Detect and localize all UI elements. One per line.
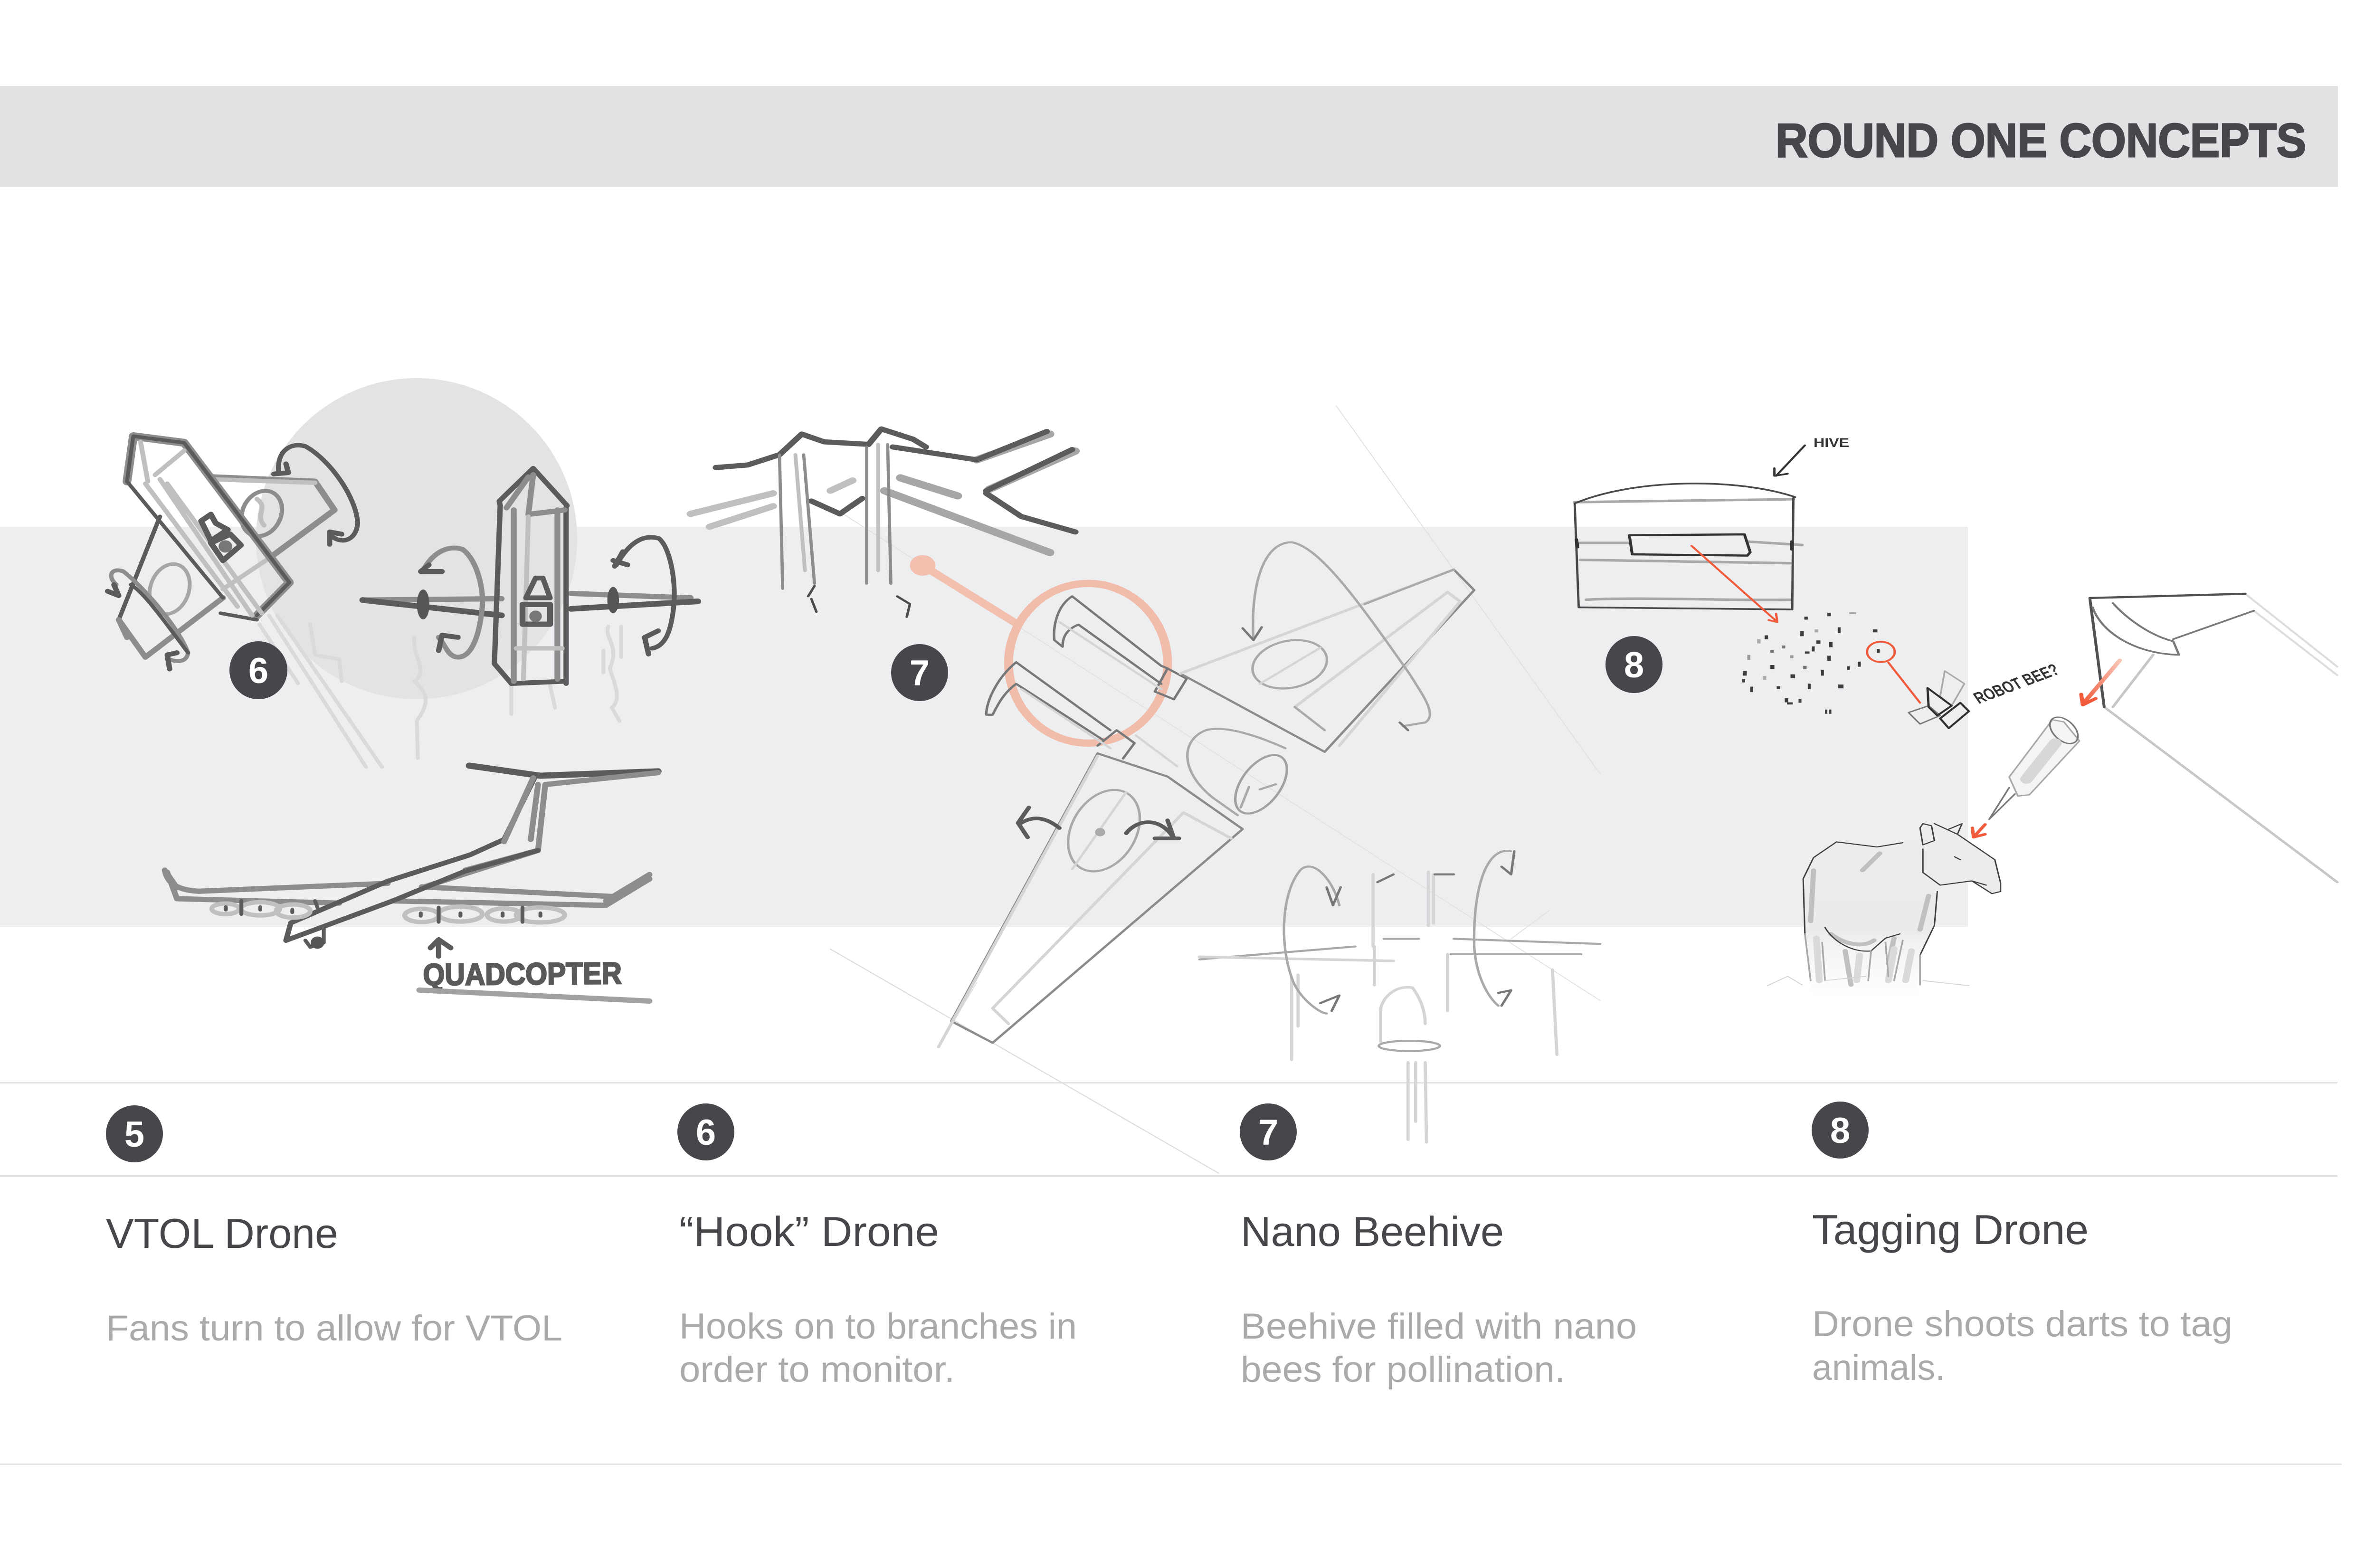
column 5: VTOL drone [106, 1105, 562, 1349]
bee swarm dots [1742, 612, 1880, 714]
badge 7: 7 [1258, 1112, 1278, 1153]
badge 8 [1812, 1102, 1869, 1159]
sketch badge 6 [229, 641, 287, 699]
badge 6: 6 [696, 1112, 716, 1153]
tapir [1767, 824, 2001, 998]
fuselage nacelle [1188, 729, 1298, 820]
sketch badge 7 [891, 644, 948, 701]
description: Fans turn to allow for VTOL [106, 1308, 562, 1349]
description [1812, 1304, 2232, 1388]
salmon callout: pointer and circle [910, 555, 1168, 743]
red arrow from drone [2081, 660, 2120, 705]
hive label and arrow [1775, 436, 1849, 476]
description: Drone shoots darts to tag [1812, 1304, 2232, 1344]
faint exhaust lines [259, 616, 621, 767]
sketch: tagging drone and tapir [1767, 594, 2337, 998]
badge 5: 5 [124, 1114, 144, 1155]
sketch: VTOL drones and airplane [108, 436, 698, 1001]
magnifier circle and line [1867, 642, 1920, 703]
right wing [1180, 542, 1474, 752]
description [1241, 1306, 1637, 1390]
sketch: front view of drone [1199, 851, 1600, 1142]
description: Hooks on to branches in [679, 1306, 1077, 1347]
quadcopter pods [212, 901, 565, 922]
badge 6 [677, 1103, 734, 1160]
red arrow from hive [1691, 546, 1777, 622]
title: VTOL Drone [106, 1210, 338, 1257]
dart [1989, 713, 2084, 819]
left wing [939, 753, 1243, 1047]
column 8: tagging drone [1812, 1102, 2232, 1388]
title: Nano Beehive [1241, 1208, 1504, 1255]
small red arrow [1972, 825, 1985, 837]
description: bees for pollination. [1241, 1349, 1565, 1390]
background circle [256, 378, 577, 699]
sketch badge 7: 7 [910, 653, 930, 694]
description: Beehive filled with nano [1241, 1306, 1637, 1347]
description [679, 1306, 1077, 1390]
hook arms [986, 596, 1187, 766]
sketch: nano beehive [1575, 436, 2063, 728]
column 6: hook drone [677, 1103, 1077, 1390]
badge 8: 8 [1830, 1111, 1850, 1151]
badge 5 [106, 1105, 163, 1162]
title: Tagging Drone [1812, 1206, 2089, 1253]
sketch badge 8 [1606, 636, 1662, 693]
faint construction lines [830, 406, 1600, 1173]
tilted drone [108, 436, 358, 669]
drone wing corner [2090, 594, 2337, 882]
title: “Hook” Drone [679, 1208, 939, 1255]
handwritten label: quadcopter: QUADCOPTER [423, 956, 622, 992]
grey sketch background band [0, 527, 1968, 927]
airplane with quadcopters [165, 766, 658, 1001]
hive label and arrow: HIVE [1814, 436, 1849, 450]
handwritten label: robot bee: ROBOT BEE? [1970, 660, 2063, 707]
upright drone [362, 468, 698, 684]
heading: round one concepts: ROUND ONE CONCEPTS [1776, 114, 2306, 167]
tree branch [691, 429, 1075, 617]
column 7: nano beehive [1240, 1103, 1637, 1390]
divider lines [0, 1082, 2342, 1465]
description: order to monitor. [679, 1349, 955, 1390]
sketch: hook drone [691, 429, 1474, 1047]
sketch badge 6: 6 [248, 651, 268, 691]
header band [0, 86, 2338, 187]
sketch badge 8: 8 [1624, 645, 1644, 685]
hive box [1575, 484, 1802, 609]
description: animals. [1812, 1348, 1945, 1388]
badge 7 [1240, 1103, 1297, 1160]
robot bee [1909, 671, 1969, 728]
